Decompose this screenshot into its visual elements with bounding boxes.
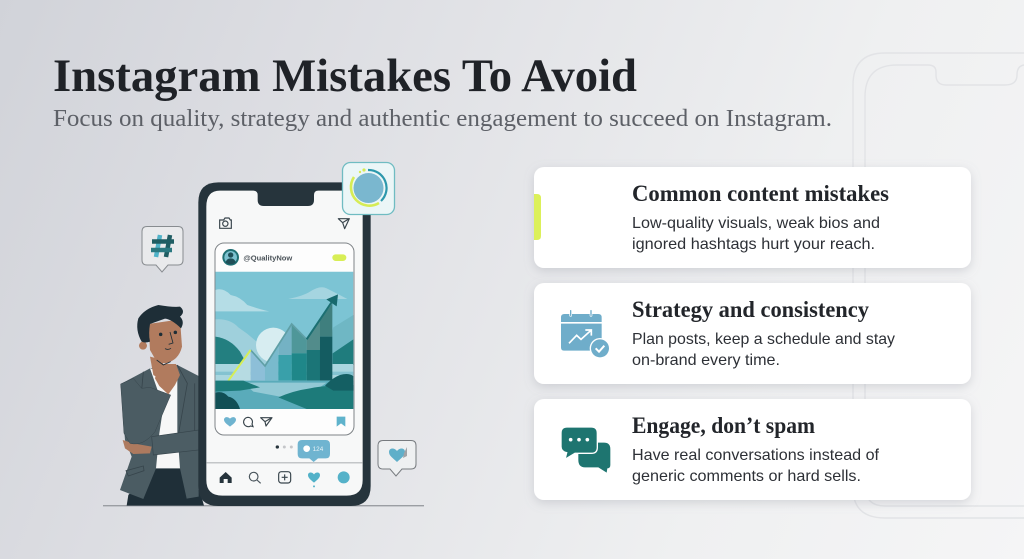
panel: strategy and consistency [534,283,971,384]
action icons [224,417,345,427]
icon: search [249,472,261,483]
post card [215,243,354,435]
body text: Have real conversations instead of [632,447,880,464]
trend line [251,324,307,366]
facial features [157,331,177,365]
icon: hash [151,235,174,257]
body text [632,447,880,485]
subtitle: Focus on quality, strategy and authentic engagement to succeed on Instagram. [53,106,832,132]
like count badge [298,440,330,462]
icon: chat bubbles [561,427,610,473]
body text: on-brand every time. [632,352,780,369]
username: @QualityNow [243,253,293,262]
body text [632,215,880,253]
phone [198,182,371,506]
icon: camera [220,218,231,228]
heading: Strategy and consistency [632,297,869,322]
body text: ignored hashtags hurt your reach. [632,236,875,253]
pocket [126,466,144,476]
lime accent tab [534,194,541,240]
body text: Plan posts, keep a schedule and stay [632,331,895,348]
icon: heart [389,448,405,462]
hair [137,305,183,342]
chart columns [228,303,332,381]
icon: home [220,472,232,483]
fist [123,440,152,454]
title: Instagram Mistakes To Avoid [53,50,637,102]
icon: nav heart [308,472,320,487]
heading: Common content mistakes [632,181,889,206]
ground line [103,505,424,506]
avatar [222,249,239,266]
foreground water [215,381,353,409]
far forearm [152,430,199,455]
phone screen [206,191,363,496]
panel: engage, don't spam [534,399,971,500]
nav divider [206,462,363,463]
icon: add [279,472,291,483]
panel: common content mistakes [534,167,971,268]
hashtag bubble [142,226,183,272]
trousers [127,467,204,506]
body text: generic comments or hard sells. [632,468,861,485]
app icon: progress ring [342,162,394,214]
shirt [150,368,180,468]
like count badge: 124 [313,446,324,453]
jacket [120,365,199,499]
lapels [137,365,195,433]
heart bubble [378,440,416,476]
neck [150,357,163,380]
hand at chin [155,364,180,394]
body text: Low-quality visuals, weak bios and [632,215,880,232]
decorative phone outline [853,53,1024,518]
person [120,305,204,506]
lime pill [332,254,346,261]
carousel dots [276,445,293,449]
face [148,319,182,363]
icon: calendar with check [561,310,610,359]
near sleeve [121,378,171,444]
ear [139,342,147,350]
phone body [198,182,371,506]
heading: Engage, don’t spam [632,413,815,438]
body text [632,331,895,369]
icon: profile dot [338,471,350,483]
arrow head [326,294,338,306]
icon: send [338,219,349,229]
post image: landscape with growth chart [215,272,353,409]
